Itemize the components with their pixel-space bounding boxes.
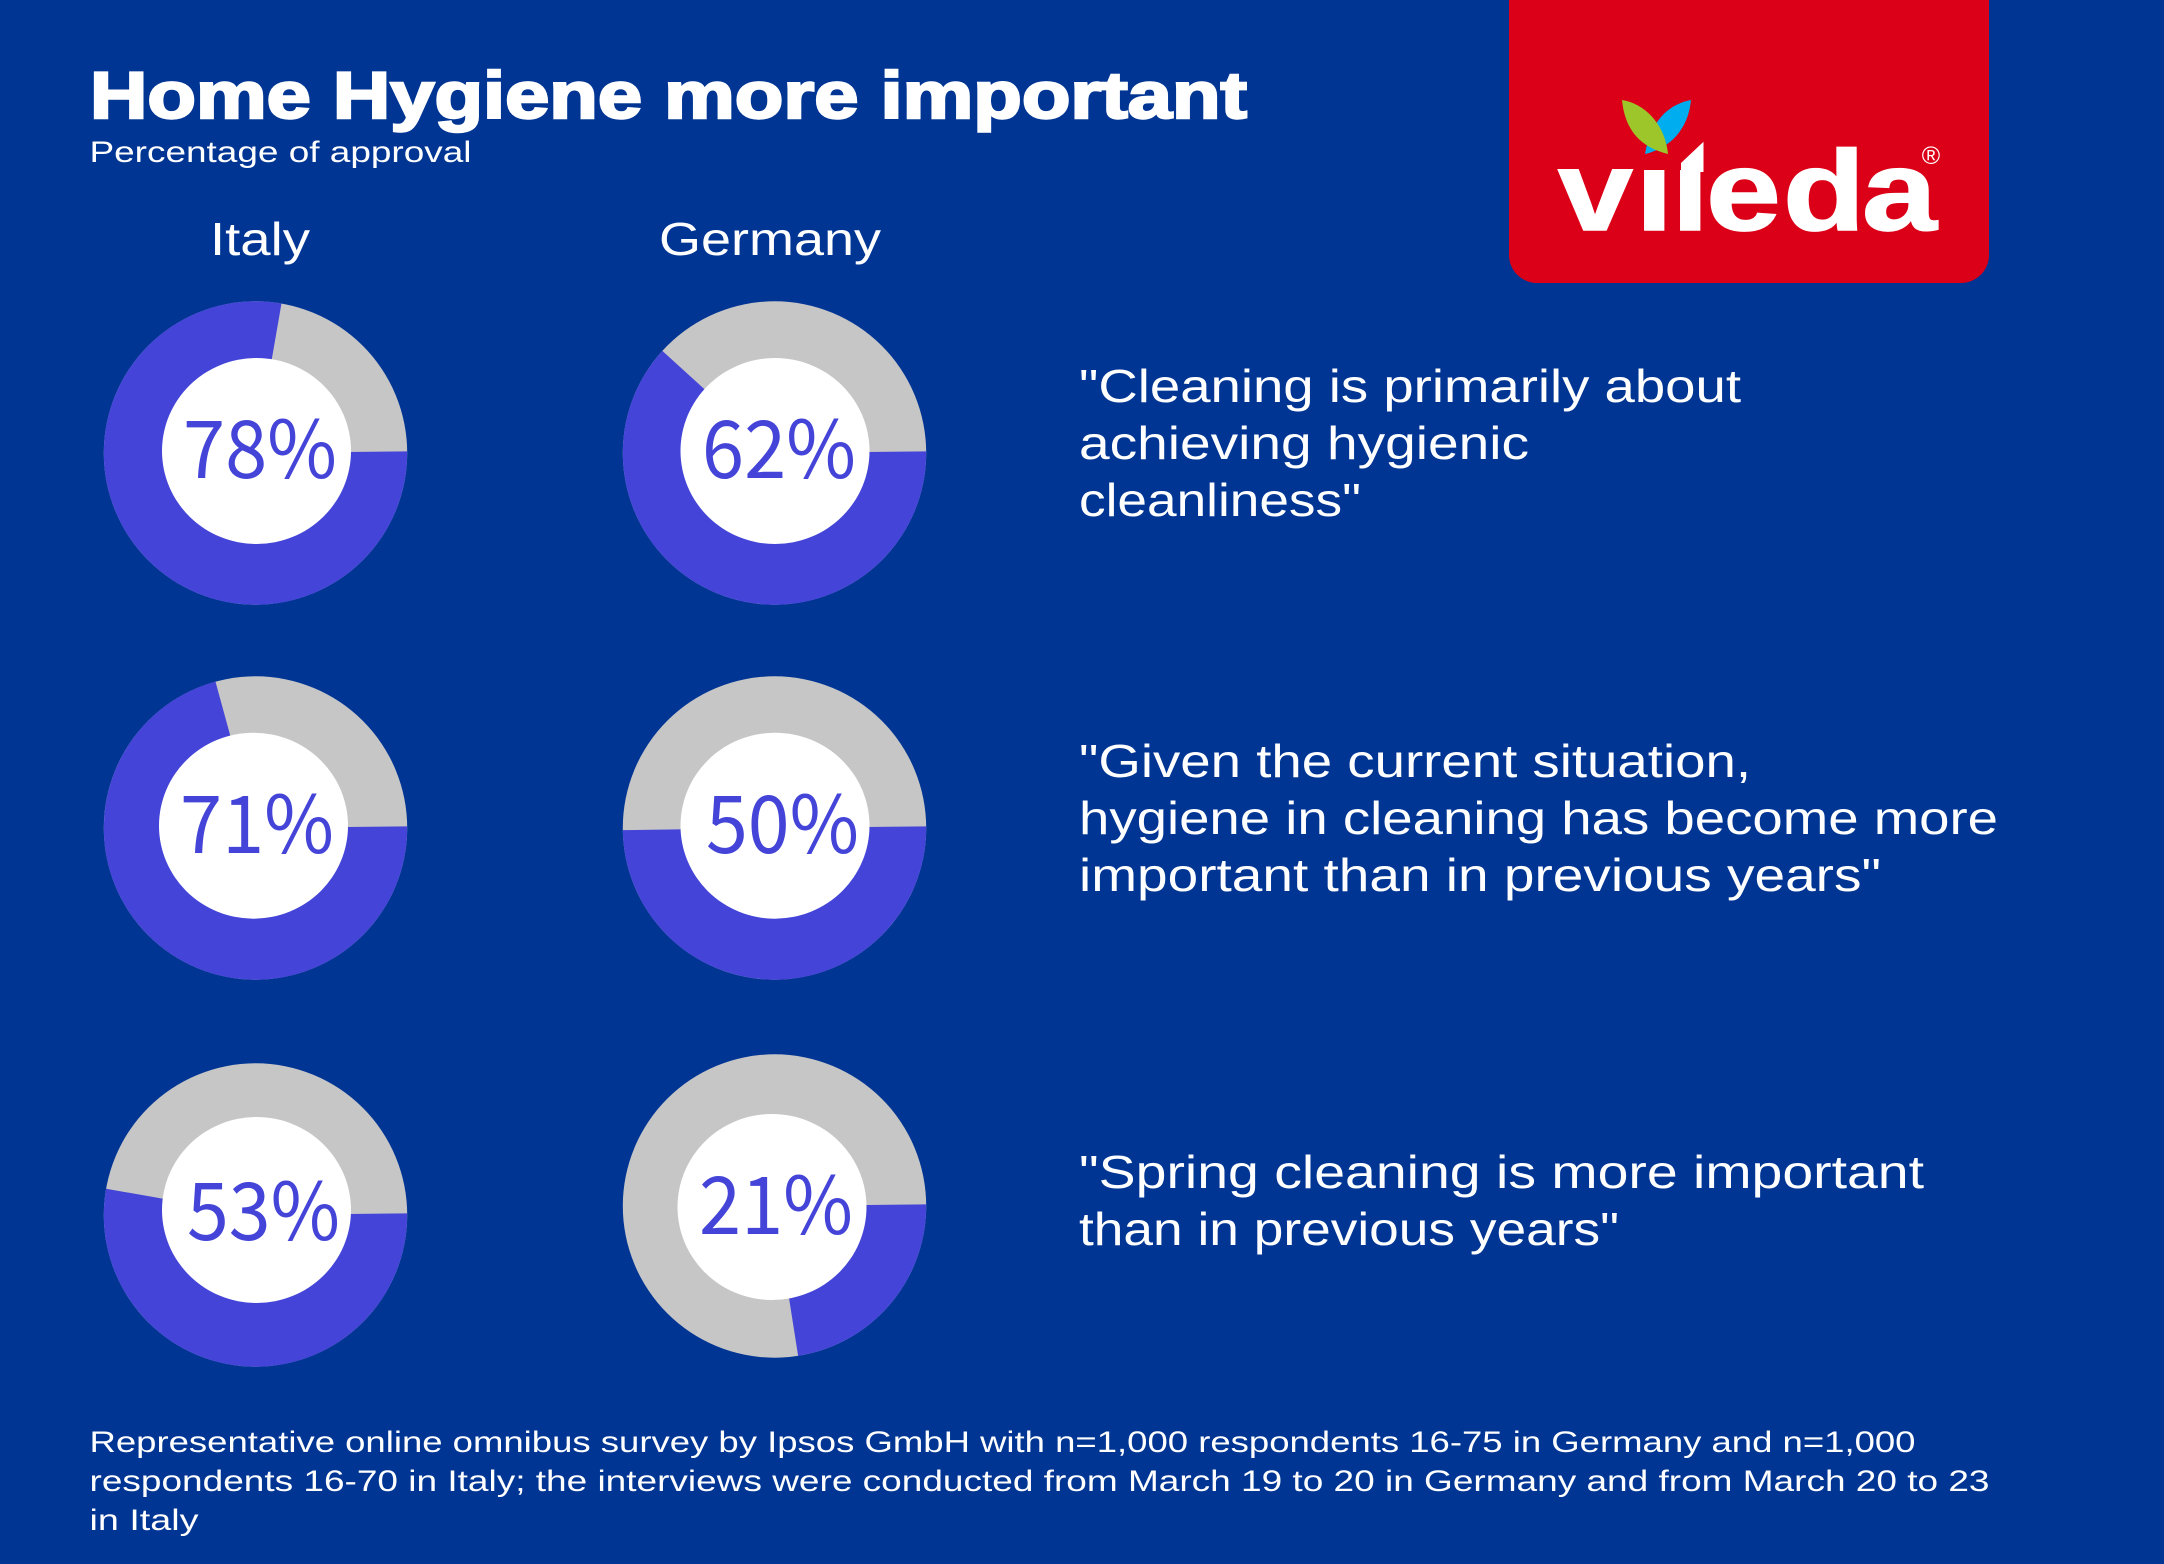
donut: Italy 53%: [104, 1063, 407, 1367]
donut: Italy 78%: [104, 301, 407, 605]
donut: Italy 53%: 53%: [187, 1148, 340, 1264]
quote: current situation: hygiene in cleaning has become more: [1079, 792, 1998, 844]
donut: Germany 21%: 21%: [699, 1142, 853, 1258]
column heading: Italy: Italy: [210, 213, 310, 265]
subtitle: Percentage of approval: [90, 136, 472, 169]
quote: hygienic cleanliness: cleanliness": [1079, 474, 1361, 526]
donut: Germany 50%: 50%: [706, 761, 859, 877]
quote: current situation: [1079, 735, 1998, 901]
footnote: respondents 16-70 in Italy; the interviews were conducted from March 19 to 20 in Germany and from March 20 to 23: [90, 1465, 1990, 1498]
quote: hygienic cleanliness: "Cleaning is primarily about: [1079, 360, 1741, 412]
donut: Germany 50%: [623, 676, 926, 980]
footnote: in Italy: [90, 1504, 198, 1537]
donut: Italy 71%: [104, 676, 407, 980]
column heading: Germany: Germany: [659, 213, 881, 265]
title: Home Hygiene more important: [90, 58, 1247, 132]
donut: Italy 78%: 78%: [183, 386, 337, 502]
logo: vileda: ®: [1922, 142, 1941, 170]
quote: hygienic cleanliness: [1079, 360, 1741, 526]
quote: spring cleaning: than in previous years": [1079, 1203, 1619, 1255]
quote: hygienic cleanliness: achieving hygienic: [1079, 417, 1529, 469]
quote: spring cleaning: [1079, 1146, 1924, 1255]
donut: Germany 21%: [623, 1054, 926, 1358]
donut: Italy 71%: 71%: [180, 761, 334, 877]
footnote: Representative online omnibus survey by Ipsos GmbH with n=1,000 respondents 16-75 in Germany and n=1,000: [90, 1426, 1916, 1459]
quote: current situation: "Given the current situation,: [1079, 735, 1751, 787]
logo: vileda: [1509, 0, 1989, 283]
footnote: [90, 1426, 1990, 1537]
donut: Germany 62%: [623, 301, 926, 605]
logo: vileda: vileda: [1558, 128, 1939, 255]
quote: spring cleaning: "Spring cleaning is more important: [1079, 1146, 1924, 1198]
quote: current situation: important than in previous years": [1079, 849, 1881, 901]
donut: Germany 62%: 62%: [702, 386, 856, 502]
